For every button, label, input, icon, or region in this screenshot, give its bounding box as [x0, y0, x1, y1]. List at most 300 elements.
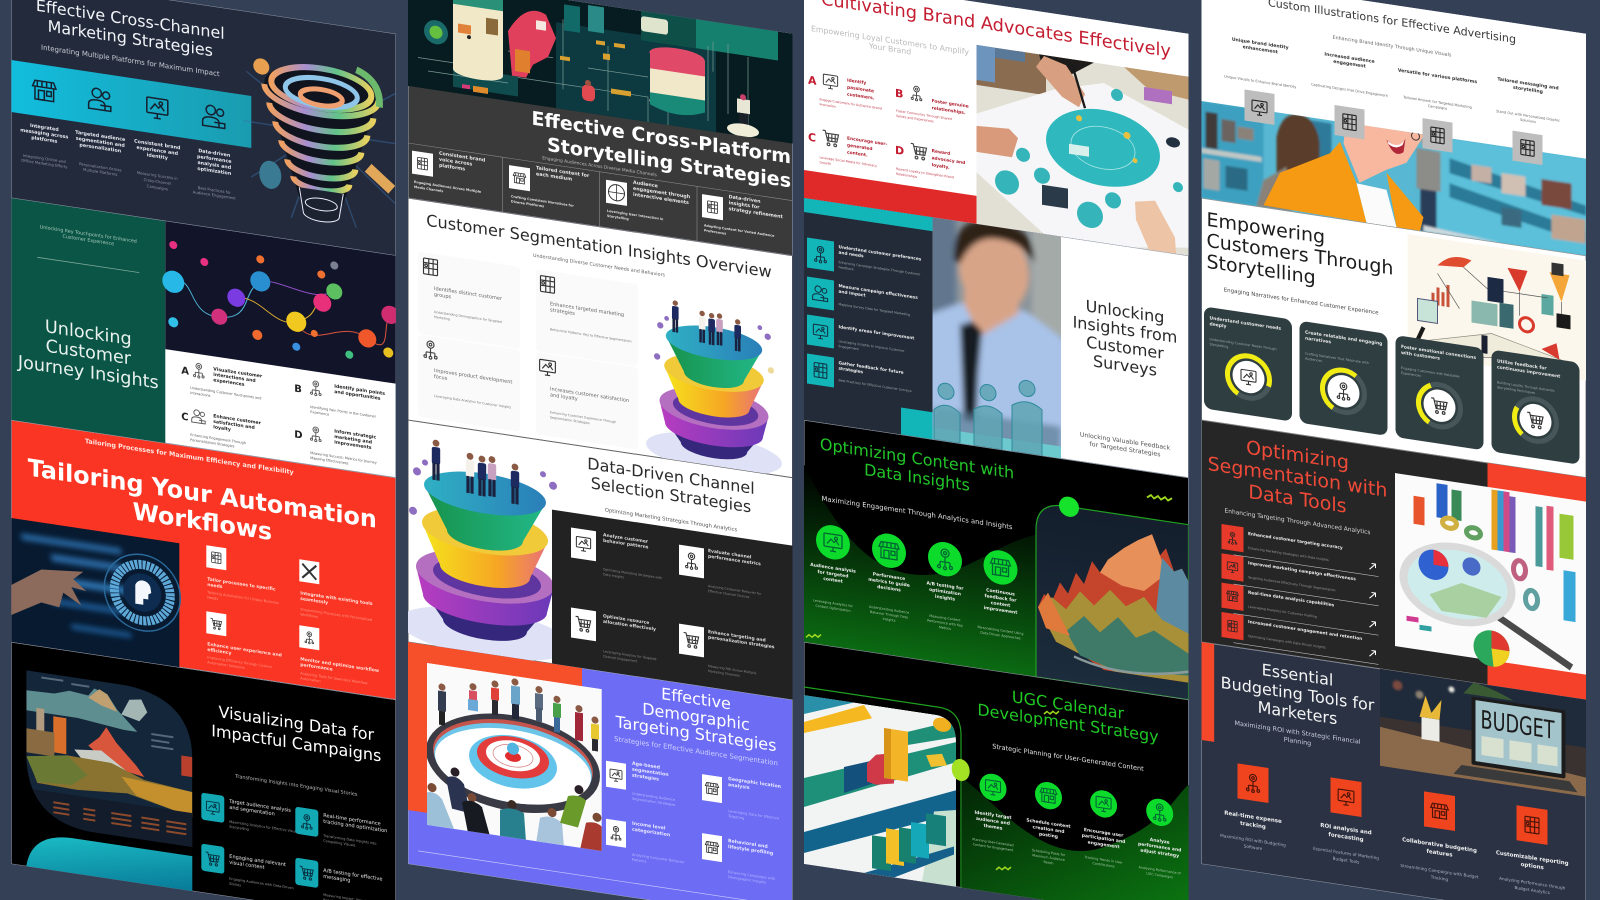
- column 1: Content Optimization: [815, 604, 851, 613]
- orange accent block: [408, 642, 582, 836]
- arrow 4: [1370, 650, 1376, 657]
- item B: Identify pain points: [334, 384, 385, 397]
- subtitle: Enhancing Targeting Through Advanced Analytics: [1225, 507, 1370, 536]
- item B: Experience: [310, 410, 329, 417]
- list item 1: Understand customer preferences: [838, 245, 921, 263]
- item D: D: [895, 144, 904, 158]
- title: Visualizing Data for: [218, 702, 374, 744]
- list item 2: Mapping Survey Data for Targeted Marketing: [838, 302, 910, 317]
- divider: [37, 257, 139, 273]
- tool 3: [1400, 788, 1479, 887]
- title: Empowering: [1206, 208, 1325, 249]
- illustration: tiered pyramid with people: [646, 296, 782, 483]
- feature 3: Cross-Channel: [144, 177, 171, 186]
- item: relevant visual content: Engaging and relevant: [229, 854, 286, 868]
- slide: Unlocking Insights from Customer Surveys: [804, 188, 1188, 491]
- row 4: Optimizing Campaigns with Data-Driven Insights: [1248, 634, 1326, 650]
- tool 3: Tracking: [1430, 874, 1449, 882]
- tool 3: Streamlining Campaigns with Budget: [1400, 863, 1479, 880]
- item: income: Analyzing Consumer Behavior: [632, 853, 684, 864]
- feature 1: Integrating Online and: [23, 153, 66, 164]
- item: relevant visual content: Engaging Audiences with Data-Driven: [229, 877, 294, 890]
- item B: B: [294, 383, 302, 396]
- tool 1: [1220, 761, 1286, 855]
- feature 2: Targeted audience: [75, 131, 125, 143]
- item 3: [606, 176, 691, 230]
- tool 2: Essential Features of Marketing: [1313, 846, 1379, 861]
- card 4: Segmentation Strategies: [550, 415, 590, 425]
- feature 2: Multiple Platforms: [83, 167, 117, 177]
- subtitle: Unlocking Valuable Feedback: [1080, 431, 1170, 452]
- title: Storytelling: [1206, 250, 1316, 289]
- column headings: Unique brand identity: [1232, 38, 1289, 51]
- column descriptions: Campaigns: [1428, 104, 1447, 111]
- column 4: performance and: [1138, 841, 1181, 854]
- item A: A: [808, 74, 817, 88]
- bottom rule: [418, 850, 792, 900]
- card 2: Enhances targeted marketing: [550, 301, 624, 318]
- item: income: Income level: [632, 822, 665, 832]
- divider grid: [408, 143, 792, 256]
- item: geography: analysis: [728, 782, 750, 791]
- green backdrop curve: [962, 751, 1188, 900]
- card 4: Increases customer satisfaction: [550, 386, 629, 404]
- title: Essential: [1262, 660, 1333, 690]
- item A: customers.: [847, 91, 875, 102]
- item C: [808, 128, 887, 175]
- column 4: improvement: [984, 605, 1018, 616]
- tool 4: Budget Analytics: [1514, 885, 1550, 895]
- column headings: Versatile for various platforms: [1398, 67, 1477, 85]
- item C: content.: [847, 149, 868, 159]
- item: resource allocation: Channel Engagement: [603, 654, 638, 664]
- item: behavior: [702, 833, 775, 886]
- feature 4: [193, 147, 236, 201]
- item B: [895, 83, 969, 129]
- tool 2: ROI analysis and: [1320, 823, 1372, 837]
- card 1: Marketing: [434, 315, 450, 321]
- column 1: [810, 522, 856, 614]
- item B: and opportunities: [334, 389, 381, 402]
- column 4: adjust strategy: [1140, 847, 1179, 859]
- item C: Encourage user-: [847, 136, 887, 147]
- title: Storytelling Strategies: [547, 133, 791, 192]
- column 1: [972, 771, 1014, 852]
- subtitle: Tailoring Processes for Maximum Efficiency and Flexibility: [85, 437, 295, 476]
- item: behavior patterns: Optimizing Marketing Strategies with: [603, 567, 662, 580]
- column 2: Schedule content: [1026, 818, 1071, 830]
- feature 2: personalization: [79, 142, 122, 155]
- item: integrate tools: Streamlining Processes with Personalized: [300, 607, 372, 622]
- teal top band: [804, 198, 933, 231]
- title: Customers Through: [1206, 229, 1393, 280]
- subtitle: Strategic Planning for User-Generated Content: [992, 742, 1144, 773]
- chart image: 3D data mountains: [1036, 502, 1188, 700]
- item: monitor workflow: [299, 625, 379, 684]
- item: behavior: Behavioral and: [728, 839, 768, 850]
- item: behavior: Enhancing Campaigns with: [728, 870, 775, 881]
- slide: Effective Demographic Targeting Strategies: [408, 642, 792, 900]
- column headings: Tailored messaging and: [1497, 77, 1559, 92]
- title: Unlocking: [1086, 296, 1164, 327]
- card 3: Foster emotional connections: [1401, 345, 1476, 361]
- tool 2: [1313, 775, 1379, 868]
- item 2: [509, 161, 590, 215]
- item: resource allocation: Optimize resource: [603, 614, 649, 626]
- item: resource allocation: [571, 607, 656, 666]
- green oval node: [952, 758, 970, 782]
- title: UGC Calendar: [1012, 687, 1124, 723]
- row 1: [1222, 524, 1343, 567]
- illustration: tiered pyramid with people: [399, 434, 571, 670]
- card 3: Experiences: [1401, 371, 1421, 378]
- item: monitor workflow: performance: [300, 662, 333, 673]
- row 2: Improved marketing campaign effectiveness: [1248, 560, 1356, 582]
- title: Effective Cross-Platform: [531, 107, 791, 168]
- item: geography: Leveraging Data for Effective: [728, 809, 779, 821]
- card 2: Behavioral Patterns: Key to Effective Segmentation: [550, 327, 631, 344]
- item 4: Preferences: [704, 228, 726, 236]
- column 1: audience and: [976, 816, 1010, 827]
- item 1: platforms: [439, 163, 465, 173]
- card 2: Create relatable and engaging: [1305, 331, 1382, 347]
- item A: passionate: [847, 84, 874, 94]
- item: tailor processes: Needs: [207, 595, 218, 601]
- item: real-time performance: tracking and optimization: [323, 819, 387, 834]
- feature 1: Offline Marketing Efforts: [21, 158, 67, 169]
- title: Marketing Strategies: [48, 17, 213, 60]
- item 3: engagement through: [633, 186, 691, 200]
- column descriptions: Unique Visuals to Enhance Brand Identity: [1224, 74, 1296, 89]
- item A: Understanding Customer Touchpoints and: [190, 386, 261, 401]
- image: journey network: [162, 221, 399, 384]
- title: Data-Driven Channel: [587, 454, 755, 498]
- item D: loyalty.: [932, 162, 950, 171]
- tool 4: [1496, 802, 1569, 898]
- item 3: Leveraging User Interaction in: [607, 209, 663, 221]
- arrow 1: [1370, 563, 1376, 570]
- card 2: strategies: [550, 307, 575, 317]
- item: channel metrics: performance metrics: [708, 554, 761, 567]
- item: target audience: and segmentation: [229, 805, 275, 818]
- list item 1: Enhancing Campaign Strategies Through Customer: [838, 260, 920, 276]
- item: targeting and personalization: Marketing Channels: [708, 669, 740, 678]
- item B: [295, 380, 385, 418]
- column 2: creation and: [1033, 824, 1064, 835]
- column descriptions: Captivating Designs that Drive Engagement: [1311, 82, 1389, 98]
- column 3: engagement: [1088, 840, 1120, 850]
- column 2: metrics to guide: [868, 577, 910, 589]
- card 4: Enhancing Customer Experience Through: [550, 410, 616, 424]
- subtitle: for Targeted Strategies: [1090, 441, 1160, 458]
- item: enhance experience: Improving Efficiency through Custom: [207, 655, 272, 669]
- item: channel metrics: Effective Channel Choices: [708, 589, 750, 599]
- subtitle: Enhancing Brand Identity Through Unique Visuals: [1333, 35, 1452, 59]
- title: Optimizing Content with: [820, 434, 1014, 482]
- item: tailor processes: needs: [207, 582, 223, 590]
- title: Demographic: [642, 699, 750, 734]
- item: age: segmentation: [632, 767, 669, 778]
- feature 3: Campaigns: [147, 183, 168, 191]
- item: channel metrics: [679, 544, 762, 601]
- item: resource allocation: Leveraging Analytics for Targeted: [603, 649, 656, 661]
- item: age: [606, 757, 676, 807]
- feature 3: experience and: [137, 145, 179, 157]
- column 1: themes: [984, 823, 1003, 832]
- item: geography: [702, 772, 781, 826]
- column 4: UGC Campaigns: [1146, 871, 1173, 879]
- item: real-time performance: [295, 807, 387, 847]
- list item 4: Best Practices for Effective Customer Surveys: [838, 378, 912, 393]
- card 3: Leveraging Data Analytics for Customer Insights: [434, 394, 511, 410]
- item A: Interactions: [190, 391, 211, 398]
- card 4: and loyalty: [550, 392, 578, 402]
- column descriptions: Stand Out with Personalized Graphic: [1496, 109, 1560, 123]
- column 3: Performance with Key: [927, 618, 963, 628]
- list item 1: Feedback: [838, 265, 854, 271]
- feature 1: platforms: [31, 135, 58, 145]
- item C: C: [181, 412, 189, 424]
- title: Workflows: [133, 497, 272, 546]
- column headings: [1232, 37, 1559, 99]
- column 2: [1026, 779, 1071, 868]
- tool 1: tracking: [1240, 821, 1266, 831]
- item 1: [412, 147, 486, 200]
- column 1: for targeted: [818, 569, 848, 580]
- item C: Enhance customer: [213, 414, 261, 426]
- feature 1: messaging across: [20, 127, 69, 141]
- item: a/b testing: messaging: [323, 874, 350, 884]
- item 2: Diverse Platforms: [511, 199, 544, 208]
- title: Segmentation with: [1208, 452, 1387, 502]
- card 4: Storytelling Techniques: [1497, 385, 1535, 395]
- column 1: Content for Engagement: [973, 842, 1014, 852]
- feature 3: Consistent brand: [134, 139, 180, 151]
- slide: Essential Budgeting Tools for Marketers: [1202, 642, 1586, 900]
- row 3: Leveraging Analytics for Customer Profiling: [1248, 605, 1317, 619]
- list item 1: [807, 237, 922, 285]
- squiggle: [1147, 494, 1172, 501]
- slide: Data-Driven Channel Selection Strategies: [399, 419, 792, 704]
- column 2: [868, 531, 910, 625]
- feature 3: identity: [147, 152, 169, 162]
- image: leaf-shaped data landscape: [25, 668, 193, 849]
- item 4: insights for: [729, 200, 760, 211]
- item: behavior patterns: Data Insights: [603, 572, 624, 579]
- feature 2: segmentation and: [76, 136, 125, 149]
- slide: Effective Cross-Channel Marketing Strategies: [11, 0, 396, 256]
- item: tailor processes: Tailoring Automation for Unique Business: [207, 590, 279, 605]
- image: laptop showing BUDGET: BUDGET: [1480, 705, 1555, 745]
- item D: Measuring Success: Metrics for Journey: [310, 451, 377, 465]
- item: relevant visual content: visual content: [229, 860, 265, 871]
- item C: Growth: [820, 160, 831, 166]
- item B: Identifying Pain Points in the Customer: [310, 405, 376, 419]
- slide: Effective Cross-Platform Storytelling Strategies: [408, 0, 792, 256]
- item: tailor processes: [206, 545, 279, 610]
- subtitle: Transforming Insights into Engaging Visual Stories: [234, 773, 358, 798]
- item C: C: [808, 131, 816, 145]
- column 4: [978, 547, 1023, 641]
- image: hand and tech circle: [11, 518, 180, 667]
- subtitle: Planning: [1284, 735, 1311, 747]
- illustration: striped funnel: [243, 53, 395, 234]
- item D: Reward Loyalty to Strengthen Brand: [896, 167, 954, 179]
- item 3: Audience: [633, 181, 658, 189]
- column 1: Leveraging Analytics for: [813, 598, 853, 608]
- item: channel metrics: Analyzing Consumer Behavior for: [708, 584, 761, 596]
- item: age: Understanding Audience: [632, 792, 675, 802]
- row 3: Real-time data analysis capabilities: [1248, 590, 1335, 609]
- item: behavior patterns: [571, 527, 662, 585]
- item: relevant visual content: [201, 844, 294, 890]
- subtitle: Engaging Audiences Across Diverse Media Channels: [542, 155, 657, 178]
- item: income: Patterns: [632, 858, 647, 864]
- column 3: [1082, 787, 1125, 870]
- item A: Visualize customer: [213, 367, 262, 380]
- item: monitor workflow: Monitor and optimize workflow: [300, 657, 379, 674]
- card 1: Understanding Customer Needs Through: [1210, 337, 1277, 351]
- item: behavior: lifestyle profiling: [728, 844, 773, 857]
- item 1: Media Channels: [414, 185, 443, 193]
- item D: improvements: [334, 439, 372, 451]
- item A: interactions and: [213, 372, 256, 384]
- slide: Optimizing Segmentation with Data Tools: [1202, 420, 1586, 700]
- card 1: Understand customer needs: [1210, 316, 1281, 332]
- title: Data Insights: [864, 460, 970, 495]
- list item 4: Gather feedback for future: [838, 361, 904, 376]
- subtitle: Customer Experience: [63, 234, 114, 247]
- image: calendar with 3D bars: [804, 695, 957, 887]
- tool 1: Real-time expense: [1224, 810, 1282, 825]
- item A: [181, 363, 262, 400]
- column 2: Performance: [873, 572, 905, 582]
- image: audience around target: [426, 663, 604, 853]
- arrow 2: [1370, 592, 1376, 599]
- item A: Identify: [847, 78, 866, 86]
- subtitle: Maximizing Engagement Through Analytics and Insights: [822, 495, 1013, 531]
- tool 2: forecasting: [1328, 832, 1364, 843]
- card 4: [1492, 350, 1580, 465]
- item B: Values and Experiences: [896, 114, 934, 124]
- item: enhance experience: Automation Solutions: [207, 660, 245, 670]
- feature 4: Best Practices for: [198, 185, 231, 195]
- card 1: Understanding Demographics for Targeted: [434, 310, 502, 324]
- feature 4: Data-driven: [198, 149, 230, 159]
- column 4: Analyze: [1150, 838, 1170, 846]
- title: Unlocking: [45, 317, 132, 350]
- column headings: enhancement: [1243, 44, 1279, 56]
- item: enhance experience: Enhance user experience and: [207, 642, 282, 659]
- item 1: Engaging Audiences Across Multiple: [414, 180, 481, 194]
- title: Data Tools: [1248, 480, 1347, 518]
- item: behavior patterns: behavior patterns: [603, 538, 649, 551]
- item C: satisfaction and: [213, 419, 255, 431]
- column 2: Insights: [883, 617, 896, 623]
- squiggle lower: [996, 865, 1011, 872]
- slide: UGC Calendar Development Strategy: [804, 642, 1188, 900]
- card 2: Audiences: [1305, 357, 1322, 363]
- column 2: Understanding Audience: [869, 605, 909, 615]
- item: integrate tools: [299, 559, 373, 627]
- item B: Foster Community Through Shared: [896, 109, 952, 121]
- column 4: feedback for: [985, 593, 1017, 604]
- icon row: [33, 79, 225, 129]
- image frame line: [804, 687, 961, 888]
- item: enhance experience: efficiency: [207, 647, 231, 657]
- title: Insights from: [1073, 312, 1177, 347]
- photo: blurred man with paper figures: [924, 206, 1072, 473]
- item: income: categorization: [632, 827, 670, 838]
- icon tiles row: [1244, 89, 1542, 166]
- item 2: Tailored content for: [536, 166, 589, 179]
- tool 3: features: [1426, 849, 1453, 859]
- list item 3: Engagement: [838, 344, 860, 351]
- subtitle: Engaging Narratives for Enhanced Customer Experience: [1224, 287, 1379, 317]
- row 1: Enhanced customer targeting accuracy: [1248, 531, 1343, 551]
- subtitle: Integrating Multiple Platforms for Maximum Impact: [41, 42, 220, 78]
- card 1: [418, 252, 520, 349]
- column 3: Contributions: [1093, 861, 1115, 869]
- item: target audience: Storytelling: [229, 825, 249, 832]
- row 4: Increased customer engagement and retention: [1248, 619, 1362, 642]
- column descriptions: Tailored Artwork for Targeted Marketing: [1403, 95, 1472, 110]
- card 2: [1300, 321, 1388, 436]
- item: integrate tools: Integrate with existing tools: [300, 591, 373, 607]
- title: Optimizing: [1246, 436, 1349, 474]
- item: age: Segmentation Strategies: [632, 797, 676, 807]
- item 4: strategy refinement: [729, 206, 783, 220]
- list item 3: Leveraging Insights to Improve Customer: [838, 339, 905, 353]
- item: age: Age-based: [632, 762, 660, 771]
- item: integrate tools: seamlessly: [300, 596, 328, 606]
- item B: relationships.: [932, 105, 966, 116]
- list item 4: [807, 353, 912, 399]
- green title panel: [11, 198, 165, 443]
- column descriptions: Solutions: [1520, 118, 1536, 124]
- item: income: [606, 817, 685, 870]
- image: data cylinders: [408, 0, 792, 144]
- item C: [182, 409, 261, 448]
- squiggle lower: [806, 632, 821, 640]
- item: targeting and personalization: personalization strategies: [708, 635, 775, 651]
- item D: marketing and: [334, 434, 372, 446]
- item: integrate tools: Workflows: [300, 612, 318, 619]
- item D: Mapping Effectiveness: [310, 456, 349, 466]
- item: relevant visual content: Stories: [229, 882, 241, 887]
- illustration: story book and icons: [1408, 234, 1586, 381]
- title: Targeting Strategies: [615, 712, 776, 755]
- column headings: engagement: [1333, 59, 1367, 70]
- list item 2: Measure campaign effectiveness: [838, 284, 918, 301]
- list item 2: and impact: [838, 289, 866, 299]
- slide: Empowering Customers Through Storytelling: [1202, 198, 1586, 478]
- tool 2: Budget Tools: [1333, 856, 1359, 865]
- item: target audience: Maximizing Analytics for Effective Visual: [229, 820, 298, 834]
- column 2: Reach: [1043, 860, 1054, 865]
- list item 1: and needs: [838, 250, 864, 259]
- title: Development Strategy: [977, 700, 1159, 746]
- feature 4: performance: [197, 154, 232, 165]
- column 1: content: [823, 576, 844, 585]
- item D: Inform strategic: [334, 429, 376, 441]
- title: Customer: [1086, 332, 1164, 363]
- item D: [895, 141, 965, 186]
- column 2: posting: [1039, 831, 1058, 840]
- slide: Unlocking Customer Journey Insights: [11, 198, 399, 478]
- list item 2: [807, 276, 918, 323]
- feature 2: [75, 130, 126, 178]
